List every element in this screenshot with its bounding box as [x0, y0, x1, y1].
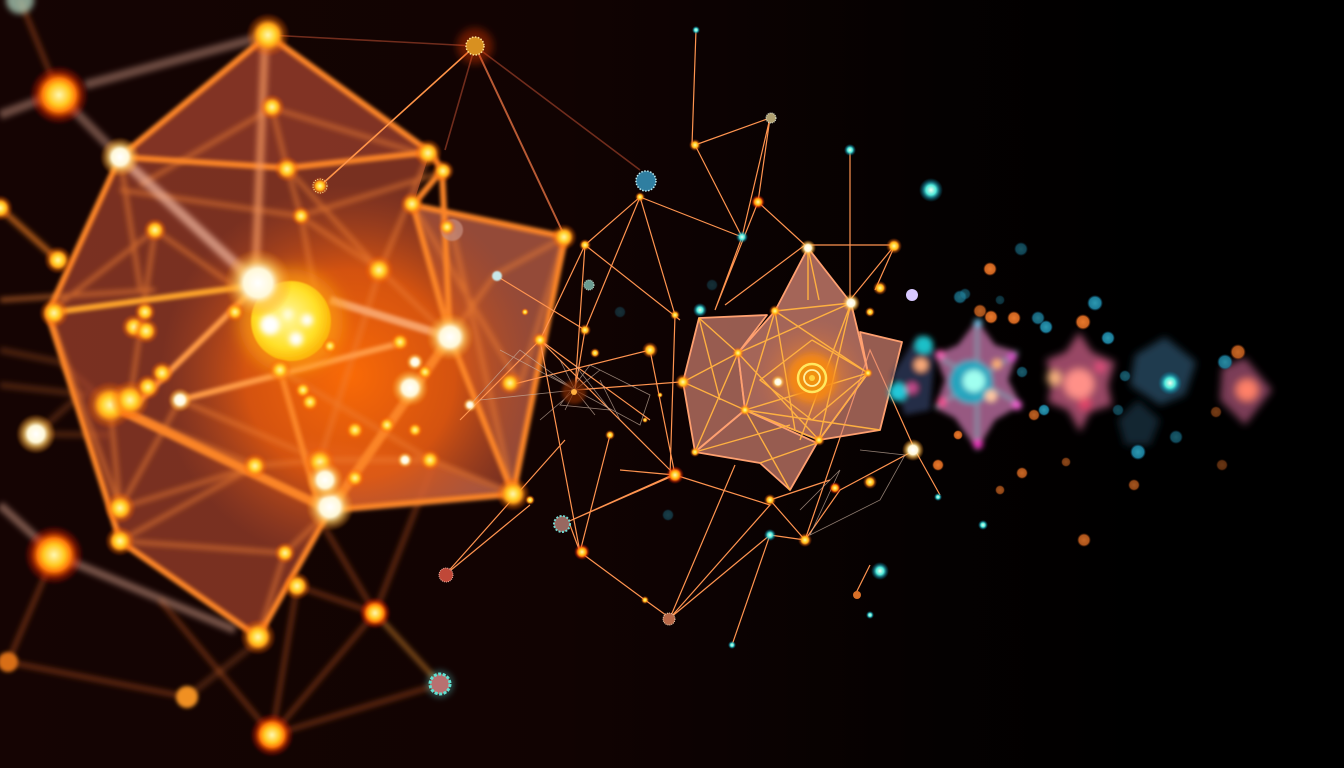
- central orb: [239, 269, 343, 373]
- far rose crystal: [1220, 358, 1272, 425]
- cyan crystal by the star: [889, 335, 935, 415]
- polyhedron bright edges: [48, 35, 565, 637]
- drifting bokeh particles: [614, 242, 1246, 547]
- rose crystal: [1046, 332, 1115, 432]
- teal crystal: [1130, 337, 1196, 405]
- right crystal stars: [889, 319, 1272, 450]
- teal crystal core: [1158, 371, 1182, 395]
- central thin network: [445, 30, 940, 645]
- sparkling speckled nodes: [311, 28, 776, 698]
- large glowing nodes: [0, 0, 577, 757]
- pale light rays: [0, 35, 268, 630]
- polyhedron back edges: [0, 108, 565, 637]
- thin upper lines: [268, 35, 640, 237]
- faint crystal: [1118, 400, 1160, 445]
- star central spiral: [788, 354, 836, 402]
- small network nodes: [521, 26, 988, 649]
- middle star polyhedron: [683, 248, 902, 490]
- large orange polyhedron: [0, 35, 565, 637]
- star faces: [683, 248, 902, 490]
- pink and cyan crystal: [935, 319, 1022, 450]
- star wire lattice: [683, 248, 880, 490]
- polyhedron faces: [48, 35, 565, 637]
- small tangled cluster: [470, 350, 905, 535]
- outer left blurred network: [0, 0, 440, 735]
